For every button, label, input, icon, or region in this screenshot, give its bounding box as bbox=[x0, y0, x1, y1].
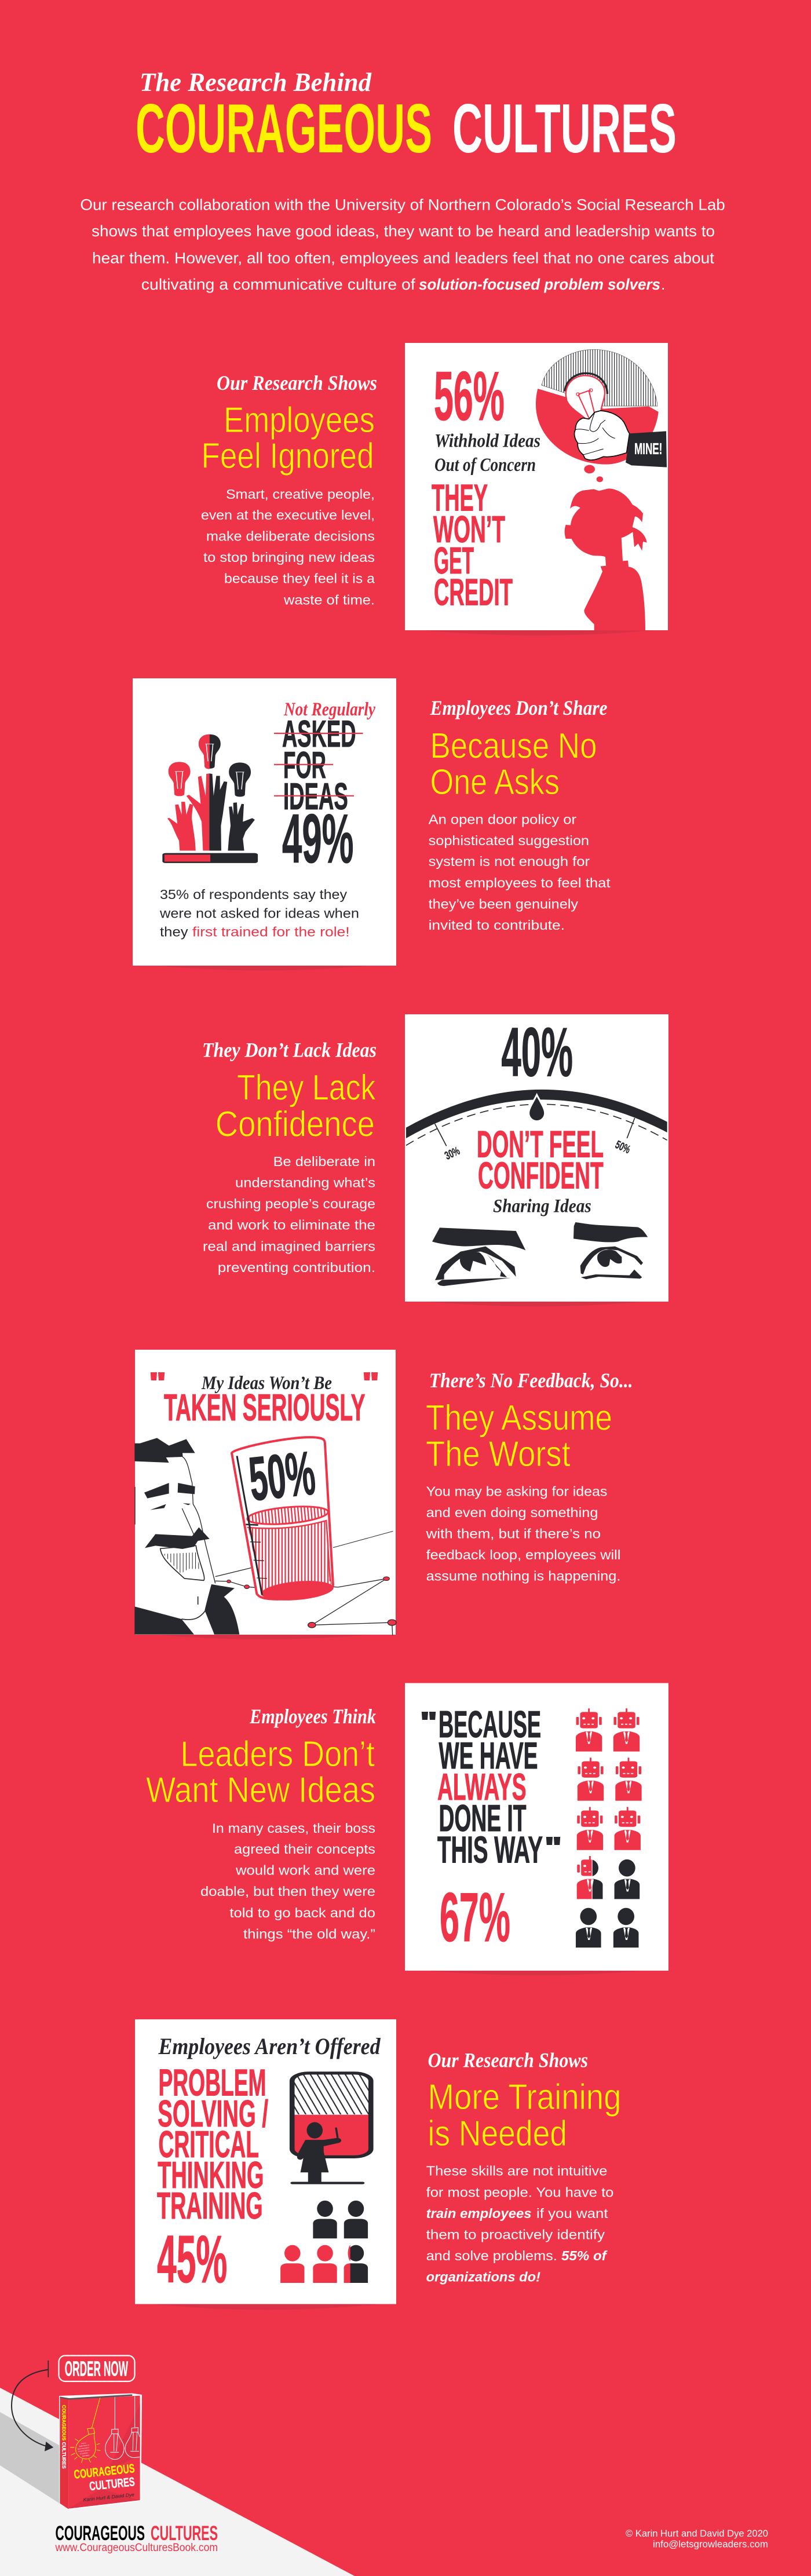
text block 6: organizations do! bbox=[426, 2270, 540, 2285]
book cover text: CULTURES bbox=[61, 2442, 67, 2469]
text block 3: crushing people’s courage bbox=[206, 1196, 375, 1211]
text block 6: These skills are not intuitive bbox=[426, 2163, 607, 2178]
gauge: 50% bbox=[613, 1138, 633, 1156]
panel 4 bbox=[134, 1350, 396, 1639]
stat 45 percent: 45% bbox=[157, 2221, 227, 2297]
text block 3: They Don’t Lack Ideas bbox=[202, 1039, 377, 1062]
text block 1: to stop bringing new ideas bbox=[203, 550, 375, 565]
section 4: they assume the worst bbox=[134, 1350, 633, 1639]
stat 67 percent: 67% bbox=[440, 1879, 510, 1956]
text block 3: preventing contribution. bbox=[218, 1260, 375, 1275]
book cover text: How to bbox=[81, 2442, 86, 2445]
text block 4: and even doing something bbox=[426, 1505, 598, 1520]
text block 2: system is not enough for bbox=[429, 854, 590, 869]
problem solving heading: TRAINING bbox=[157, 2184, 263, 2227]
stat 49 percent: 49% bbox=[282, 800, 353, 878]
my ideas won't be: My Ideas Won’t Be bbox=[201, 1373, 332, 1394]
problem solving heading: PROBLEM bbox=[159, 2062, 266, 2104]
text block 1: even at the executive level, bbox=[201, 507, 375, 522]
text block 3: They Lack bbox=[237, 1068, 376, 1108]
withhold text: Out of Concern bbox=[434, 455, 536, 476]
graph lines bbox=[215, 1531, 396, 1635]
text block 1: because they feel it is a bbox=[224, 571, 375, 586]
caption: first trained for the role! bbox=[192, 925, 350, 940]
text block 1: waste of time. bbox=[283, 592, 375, 607]
text block 6: them to proactively identify bbox=[426, 2227, 605, 2242]
text block 6: Our Research Shows bbox=[428, 2048, 588, 2071]
book cover text: COURAGEOUS bbox=[61, 2405, 67, 2441]
text block 1: make deliberate decisions bbox=[206, 529, 375, 544]
copyright: info@letsgrowleaders.com bbox=[653, 2539, 768, 2550]
asked for ideas: IDEAS bbox=[283, 775, 348, 817]
footer logo: COURAGEOUS bbox=[56, 2522, 145, 2545]
order now button bbox=[59, 2355, 134, 2381]
copyright: © Karin Hurt and David Dye 2020 bbox=[626, 2528, 768, 2539]
text block 6: 55% of bbox=[561, 2248, 608, 2263]
title block bbox=[136, 67, 677, 167]
footer url: www.CourageousCulturesBook.com bbox=[55, 2542, 218, 2554]
footer bbox=[0, 2355, 768, 2576]
problem solving heading: SOLVING / bbox=[158, 2092, 268, 2135]
panel 5 bbox=[405, 1683, 668, 1975]
quote marks: " bbox=[362, 1368, 379, 1398]
caption: 35% of respondents say they bbox=[160, 887, 348, 902]
intro paragraph: shows that employees have good ideas, they want to be heard and leadership wants to bbox=[92, 222, 715, 240]
asked for ideas bbox=[274, 712, 363, 817]
text block 2: One Asks bbox=[430, 762, 560, 802]
text block 5: In many cases, their boss bbox=[212, 1821, 375, 1836]
text block 4: There’s No Feedback, So... bbox=[429, 1369, 633, 1392]
icon: thought bubble with fist and bulb: MINE! bbox=[634, 440, 662, 458]
asked for ideas: FOR bbox=[283, 744, 326, 786]
text block 2: invited to contribute. bbox=[429, 918, 565, 933]
text block 4: You may be asking for ideas bbox=[426, 1484, 607, 1499]
book cover text: CULTURES bbox=[89, 2475, 136, 2493]
stat 56 percent: 56% bbox=[434, 357, 505, 435]
footer logo: CULTURES bbox=[151, 2522, 218, 2545]
glass: 50% bbox=[246, 1438, 318, 1514]
quote: THIS WAY bbox=[437, 1828, 543, 1870]
order now button: ORDER NOW bbox=[65, 2357, 128, 2381]
intro paragraph: hear them. However, all too often, employees and leaders feel that no one cares about bbox=[92, 249, 715, 266]
caption: were not asked for ideas when bbox=[159, 906, 359, 921]
intro paragraph: solution-focused problem solvers bbox=[419, 276, 660, 293]
don't feel confident: CONFIDENT bbox=[478, 1154, 604, 1197]
gauge: 30% bbox=[443, 1145, 462, 1163]
arrow bbox=[12, 2361, 53, 2451]
section 2: because no one asks bbox=[133, 678, 611, 971]
caption bbox=[159, 887, 359, 940]
panel 2 bbox=[133, 678, 396, 971]
quote: BECAUSE bbox=[439, 1703, 541, 1745]
section 3: they lack confidence bbox=[202, 1013, 668, 1307]
text block 3: and work to eliminate the bbox=[208, 1218, 375, 1233]
text block 4: feedback loop, employees will bbox=[426, 1547, 620, 1562]
withhold text: Withhold Ideas bbox=[434, 431, 540, 452]
panel 3 bbox=[405, 1013, 668, 1307]
book cover text: Advocates bbox=[82, 2454, 90, 2457]
text block 5: Employees Think bbox=[249, 1705, 376, 1728]
they won't get credit: GET bbox=[434, 539, 474, 582]
text block 6: if you want bbox=[536, 2206, 608, 2221]
text block 5: things “the old way.” bbox=[243, 1926, 375, 1941]
text block 4: They Assume bbox=[426, 1398, 612, 1438]
not regularly: Not Regularly bbox=[283, 699, 375, 720]
text block 2: An open door policy or bbox=[429, 812, 576, 827]
quote bbox=[420, 1703, 562, 1870]
text block 1: Feel Ignored bbox=[202, 436, 374, 476]
problem solving heading: CRITICAL bbox=[159, 2123, 259, 2165]
intro paragraph: . bbox=[661, 276, 666, 293]
text block 4 bbox=[425, 1369, 633, 1584]
book cover text: COURAGEOUS bbox=[73, 2461, 136, 2482]
quote: DONE IT bbox=[439, 1797, 526, 1839]
stat 40 percent: 40% bbox=[501, 1013, 573, 1091]
section 6: more training is needed bbox=[135, 2019, 621, 2310]
title block: The Research Behind bbox=[140, 67, 372, 97]
problem solving heading: THINKING bbox=[158, 2154, 264, 2196]
text block 2: they’ve been genuinely bbox=[429, 897, 579, 912]
text block 2: Because No bbox=[430, 726, 597, 766]
icon: silhouette bbox=[565, 488, 647, 630]
text block 4: The Worst bbox=[426, 1434, 571, 1474]
text block 1 bbox=[201, 371, 377, 607]
text block 5 bbox=[146, 1705, 376, 1941]
text block 1: Employees bbox=[224, 400, 375, 440]
text block 6: and solve problems. bbox=[426, 2248, 557, 2263]
they won't get credit: WON’T bbox=[433, 508, 505, 550]
copyright bbox=[626, 2528, 768, 2550]
text block 5: doable, but then they were bbox=[200, 1884, 375, 1899]
intro paragraph bbox=[80, 196, 725, 293]
caption: they bbox=[160, 925, 188, 940]
withhold text bbox=[434, 431, 540, 476]
panel 1 bbox=[405, 343, 668, 635]
text block 6: More Training bbox=[428, 2077, 621, 2117]
book cover text: Micro-Innovators, bbox=[78, 2446, 90, 2450]
text block 6: for most people. You have to bbox=[426, 2184, 613, 2199]
text block 3: Confidence bbox=[215, 1104, 375, 1144]
gauge bbox=[406, 1090, 667, 1163]
sharing ideas: Sharing Ideas bbox=[493, 1196, 591, 1217]
book cover text: & Customer bbox=[80, 2451, 88, 2455]
text block 6: is Needed bbox=[428, 2114, 567, 2154]
icon: hands and bulbs bbox=[162, 735, 258, 863]
text block 2: most employees to feel that bbox=[429, 875, 611, 890]
text block 1: Smart, creative people, bbox=[226, 487, 375, 502]
icon: class of people bbox=[280, 2201, 368, 2283]
glass bbox=[232, 1437, 334, 1603]
text block 5: Leaders Don’t bbox=[181, 1734, 375, 1774]
section 1: employees feel ignored bbox=[201, 343, 668, 635]
illustration: man and glass bbox=[134, 1437, 396, 1635]
text block 3: understanding what’s bbox=[235, 1175, 375, 1190]
book cover text bbox=[61, 2405, 136, 2502]
quote marks: " bbox=[149, 1368, 166, 1398]
they won't get credit: THEY bbox=[432, 477, 488, 519]
text block 6 bbox=[426, 2048, 621, 2285]
don't feel confident bbox=[477, 1123, 604, 1197]
panel 6 bbox=[135, 2019, 396, 2310]
book bbox=[59, 2394, 142, 2510]
text block 3: real and imagined barriers bbox=[203, 1238, 375, 1254]
icon: teacher and class bbox=[280, 2073, 371, 2283]
icon grid: robots and people bbox=[576, 1708, 642, 1947]
section 5: leaders don't want new ideas bbox=[146, 1683, 668, 1975]
eyes bbox=[432, 1222, 648, 1286]
intro paragraph: cultivating a communicative culture of bbox=[141, 276, 415, 293]
book shadow bbox=[0, 2412, 60, 2504]
icon: thought bubble with fist and bulb bbox=[536, 349, 667, 630]
employees aren't offered: Employees Aren’t Offered bbox=[158, 2033, 381, 2059]
text block 4: assume nothing is happening. bbox=[426, 1569, 620, 1584]
don't feel confident: DON’T FEEL bbox=[477, 1123, 604, 1165]
footer white diagonal bbox=[0, 2388, 355, 2576]
book cover text: Karin Hurt & David Dye bbox=[83, 2491, 135, 2502]
intro paragraph: Our research collaboration with the University of Northern Colorado’s Social Research Lab bbox=[80, 196, 725, 213]
text block 5: told to go back and do bbox=[229, 1905, 375, 1920]
icon: teacher at board bbox=[290, 2073, 371, 2184]
book bulbs bbox=[70, 2396, 140, 2463]
book cover text: Build Teams of bbox=[79, 2444, 89, 2447]
man's face bbox=[134, 1438, 239, 1635]
text block 2 bbox=[429, 696, 611, 933]
quote: " bbox=[545, 1832, 562, 1863]
text block 2: sophisticated suggestion bbox=[429, 833, 589, 848]
text block 6: train employees bbox=[426, 2206, 532, 2221]
problem solving heading bbox=[157, 2062, 268, 2227]
quote: WE HAVE bbox=[439, 1734, 538, 1777]
quote: ALWAYS bbox=[437, 1766, 526, 1808]
asked for ideas: ASKED bbox=[282, 712, 356, 755]
quote: " bbox=[420, 1707, 437, 1738]
title: courageous cultures: COURAGEOUS bbox=[136, 90, 432, 167]
text block 2: Employees Don’t Share bbox=[430, 696, 608, 719]
text block 4: with them, but if there’s no bbox=[425, 1526, 601, 1541]
taken seriously: TAKEN SERIOUSLY bbox=[164, 1386, 365, 1428]
they won't get credit bbox=[432, 477, 513, 613]
text block 1: Our Research Shows bbox=[217, 371, 377, 394]
text block 3: Be deliberate in bbox=[273, 1154, 375, 1169]
text block 5: agreed their concepts bbox=[234, 1841, 375, 1857]
book cover text: Problem Solvers, bbox=[78, 2449, 90, 2453]
text block 3 bbox=[202, 1039, 377, 1275]
gauge and eyes bbox=[406, 1090, 667, 1286]
quote marks bbox=[149, 1368, 379, 1398]
text block 5: Want New Ideas bbox=[146, 1770, 375, 1810]
text block 5: would work and were bbox=[235, 1862, 375, 1877]
they won't get credit: CREDIT bbox=[434, 571, 513, 613]
